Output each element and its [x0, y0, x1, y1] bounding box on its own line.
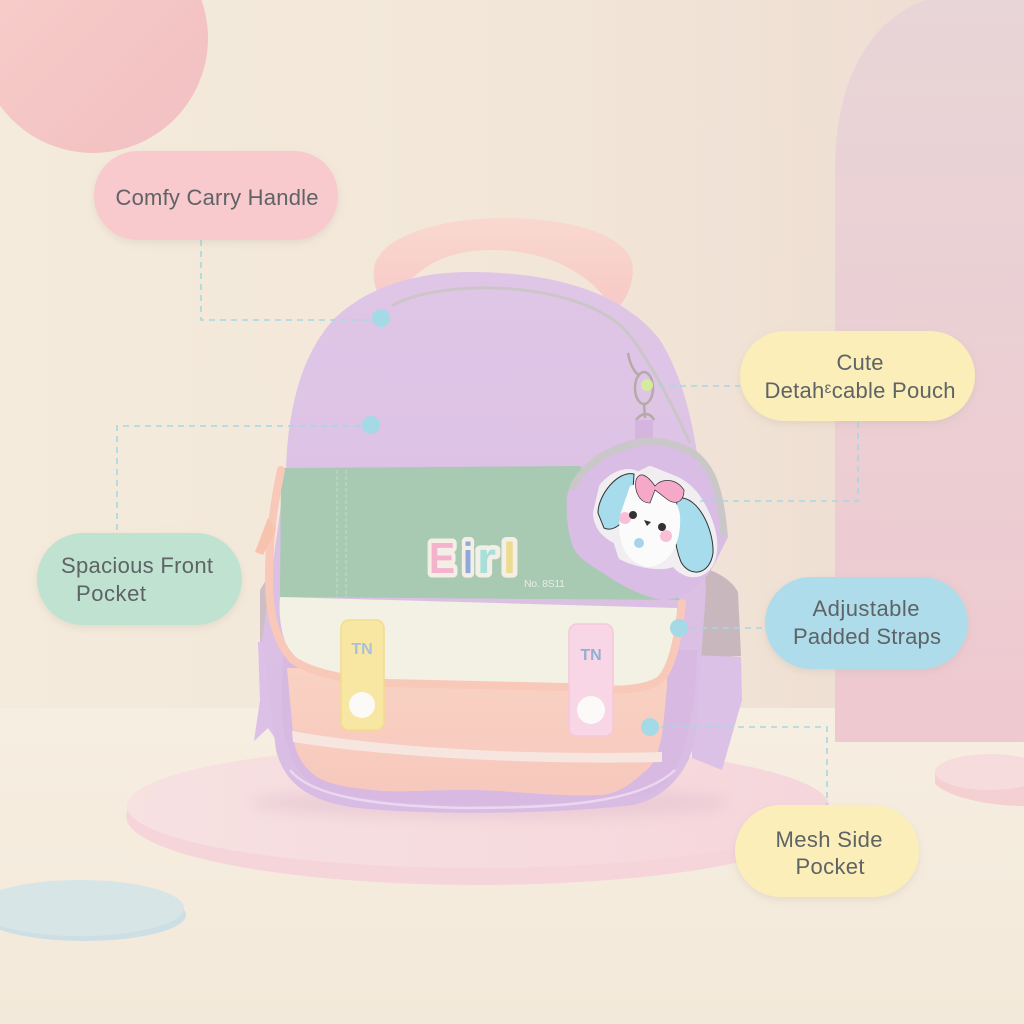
backpack: [254, 218, 742, 813]
Girl logo: i: [463, 534, 473, 583]
round pedestal: [126, 744, 830, 885]
decorative pink circle: [0, 0, 208, 153]
left mesh: [260, 570, 280, 648]
pale blue disk: [0, 880, 186, 941]
bunny sticker: [597, 470, 713, 573]
carry handle: [374, 218, 633, 312]
Girl logo: l: [503, 534, 516, 583]
cream stripe on pocket: [292, 731, 662, 763]
label: Spacious Front Pocket: Spacious Front: [61, 553, 213, 578]
coin pouch: [567, 438, 728, 600]
background wall: [0, 0, 1024, 710]
label: Adjustable Padded Straps: [765, 577, 968, 669]
peach flap piping: [269, 470, 682, 690]
small pink disk: [935, 754, 1024, 806]
label: Cute Detachable Pouch: Detahᵋcable Pouch: [764, 378, 956, 403]
label: Adjustable Padded Straps: Padded Straps: [793, 624, 941, 649]
zipper seam: [392, 288, 690, 443]
pink strap: [569, 624, 613, 736]
label: Cute Detachable Pouch: Cute: [836, 350, 884, 375]
Girl logo: i: [463, 534, 473, 583]
cream flap: [280, 597, 677, 689]
peach zipper tab: [255, 518, 276, 555]
Girl logo: r: [477, 534, 496, 583]
pouch strap: [635, 420, 653, 440]
Girl logo: l: [503, 534, 516, 583]
label: Adjustable Padded Straps: Adjustable: [812, 596, 920, 621]
label: Spacious Front Pocket: [37, 533, 242, 625]
trim highlights: [290, 770, 675, 808]
yellow strap: [341, 620, 384, 730]
label: Mesh Side Pocket: Mesh Side: [776, 827, 882, 852]
green panel stitching: [337, 470, 346, 597]
right mesh side pocket: [690, 565, 741, 658]
leader lines and anchor dots: [117, 240, 858, 805]
label: Mesh Side Pocket: Pocket: [796, 854, 864, 879]
Girl logo: E: [429, 534, 455, 583]
label: Comfy Carry Handle: Comfy Carry Handle: [116, 185, 318, 210]
main purple body: [262, 272, 706, 813]
decorative pink arch: [835, 0, 1024, 742]
label: Mesh Side Pocket: [735, 805, 919, 897]
left side wing: [254, 642, 300, 775]
green panel: [280, 466, 680, 600]
right side wing: [690, 655, 742, 770]
Girl logo: r: [477, 534, 496, 583]
Girl logo: E: [429, 534, 455, 583]
label: Cute Detachable Pouch: [740, 331, 975, 421]
purple lower trim: [282, 650, 697, 805]
label: Spacious Front Pocket: Pocket: [76, 581, 146, 606]
metal clasp: [628, 353, 654, 420]
pink strap: TN: [580, 647, 602, 664]
background floor: [0, 708, 1024, 1024]
peach front pocket: [287, 668, 667, 795]
model number: No. 8S11: [524, 578, 565, 590]
Girl logo: [429, 534, 516, 583]
label: Comfy Carry Handle: [94, 151, 338, 240]
yellow strap: TN: [351, 641, 373, 658]
